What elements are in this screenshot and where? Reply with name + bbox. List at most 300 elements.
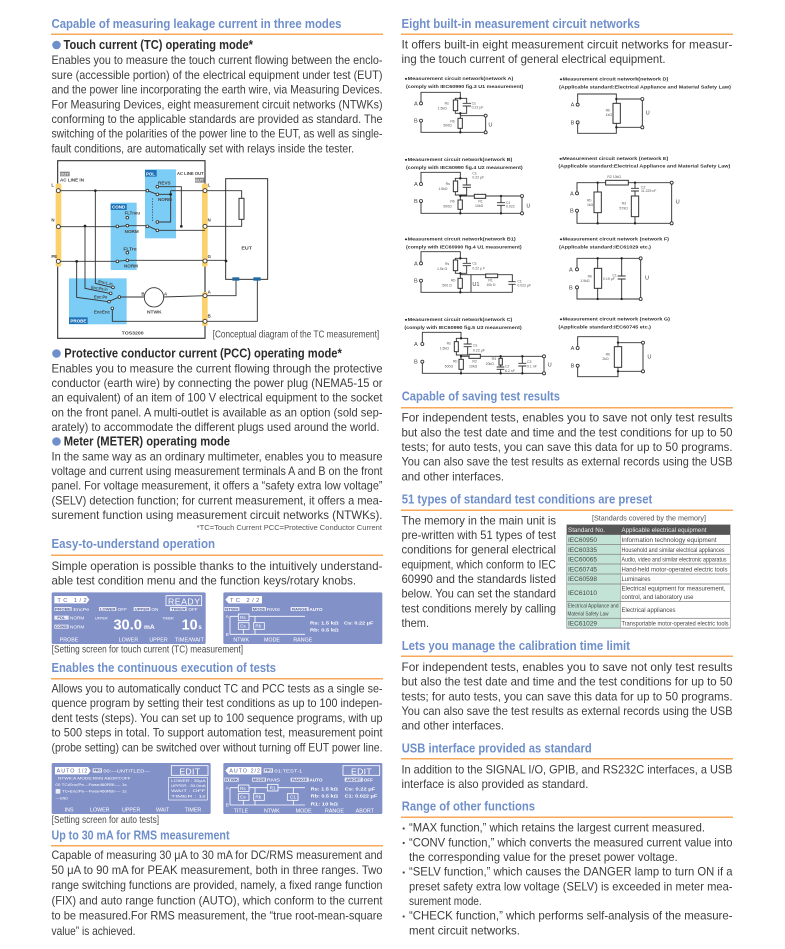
circuit: network C: 6.2 nF xyxy=(505,369,515,373)
LCD screen: auto test 2/2: ABORT xyxy=(356,808,375,814)
text block: saving test results: but also the test date and time and the test conditions for up to 50 xyxy=(402,425,733,439)
circuit: network B: Rb xyxy=(450,199,455,203)
LCD screen: auto test 1/2: EDIT xyxy=(179,766,201,776)
chart: conceptual diagram of the TC measurement: A xyxy=(208,289,212,294)
text block: meter mode: In the same way as an ordinary multimeter, enables you to measure xyxy=(52,449,383,463)
LCD screen: auto test 2/2: Rb: 0.5 kΩ xyxy=(311,794,338,799)
circuit: network C: R3 xyxy=(492,357,496,361)
LCD screen: TC setting 1/2: READY xyxy=(168,596,200,606)
LCD screen: auto test 1/2: 00:---UNTITLED--- xyxy=(103,769,150,775)
LCD screen: auto test 2/2: C1 xyxy=(290,795,296,800)
LCD screen: auto test 2/2: EDIT xyxy=(351,766,372,776)
LCD screen: TC setting 2/2: B xyxy=(226,632,229,637)
LCD screen: TC setting 1/2: mA xyxy=(144,624,155,631)
heading: USB: USB interface provided as standard xyxy=(402,740,592,755)
circuit: network B1: R1 xyxy=(488,279,493,283)
circuit: network D: 1kΩ xyxy=(606,113,612,117)
LCD screen: auto test 1/2: NTWK:A MODE:RMS ABORT:OFF xyxy=(58,777,132,781)
chart: conceptual diagram of the TC measurement: Enc:L.in xyxy=(98,279,113,287)
circuit: network C: Rb xyxy=(453,359,458,363)
chart: conceptual diagram of the TC measurement: PE xyxy=(51,254,57,259)
LCD screen: auto test 2/2: Rb xyxy=(255,795,262,800)
text block: RMS measurement: to be measured.For RMS measurement, the “true root-mean-square xyxy=(52,909,383,923)
text block: touch current mode: switching of the polarities of the power line to the EUT, as well as single- xyxy=(52,127,383,141)
table: standards covered by the memory: Household and similar electrical appliances xyxy=(622,547,725,554)
circuit: network D: ●Measurement circuit network(network D) xyxy=(559,77,669,82)
circuit: network C: R2 xyxy=(472,359,477,363)
chart: conceptual diagram of the TC measurement: PROBE xyxy=(70,318,86,323)
circuit: network B: Rs xyxy=(446,182,450,186)
chart: conceptual diagram of the TC measurement: AC LINE OUT xyxy=(177,171,204,176)
circuit: network E: Rb xyxy=(587,198,592,202)
text block: saving test results: and other interfaces. xyxy=(402,469,504,483)
circuit: network B1 xyxy=(404,237,531,293)
text block: touch current mode xyxy=(52,37,383,155)
circuit: network A: Cs xyxy=(472,101,476,105)
LCD screen: auto test 2/2: NTWK xyxy=(225,778,238,782)
LCD screen: TC setting 1/2 xyxy=(52,592,206,644)
chart: conceptual diagram of the TC measurement: FLTre xyxy=(123,246,137,251)
LCD screen: auto test 2/2: R1 xyxy=(270,785,276,790)
caption: TC setting screen: [Setting screen for touch current (TC) measurement] xyxy=(52,645,243,656)
circuit: network G: 2kΩ xyxy=(602,357,609,361)
heading: eight networks: Eight built-in measurement circuit networks xyxy=(402,16,640,31)
circuit: network D: A xyxy=(571,103,575,109)
circuit: network B: 1.5kΩ xyxy=(438,187,448,191)
circuit: network G: (Applicable standard:IEC60745 etc.) xyxy=(558,325,652,330)
chart: conceptual diagram of the TC measurement: L xyxy=(51,183,54,188)
LCD screen: TC setting 1/2: TC 1/2 xyxy=(57,598,87,604)
circuit: network B1: A xyxy=(414,261,418,267)
text block: easy operation xyxy=(52,559,382,588)
circuit: network C: U xyxy=(548,362,552,368)
LCD screen: auto test 2/2: MODE xyxy=(253,778,266,782)
circuit: network D: U xyxy=(646,110,650,116)
text block: continuous execution: quence program by setting their test conditions as up to 100 indepen- xyxy=(52,696,383,710)
text block: touch current mode: sure (accessible portion) of the electrical equipment under test (EUT) xyxy=(52,68,382,82)
circuit: network B: (comply with IEC60990 fig.4 U2 measurement) xyxy=(406,165,523,170)
circuit: network G xyxy=(558,317,671,377)
LCD screen: TC setting 1/2: NORM xyxy=(70,624,84,629)
LCD screen: TC setting 1/2: ON xyxy=(151,607,158,612)
caption: conceptual diagram: [Conceptual diagram of the TC measurement] xyxy=(213,330,379,341)
LCD screen: TC setting 2/2: AUTO xyxy=(309,607,323,612)
circuit: network C: 500Ω xyxy=(445,364,453,368)
LCD screen: TC setting 1/2: OFF xyxy=(188,607,198,612)
circuit: network B1: 10k Ω xyxy=(486,283,496,287)
LCD screen: auto test 1/2: LOWER : 30μA xyxy=(171,779,206,783)
circuit: network C: 9.1 nF xyxy=(527,364,537,368)
circuit: network A: 0.22 μF xyxy=(472,106,484,110)
LCD screen: auto test 2/2: AUTO xyxy=(309,778,323,783)
chart: conceptual diagram of the TC measurement: EUT xyxy=(195,178,204,183)
text block: preset conditions: 60990 and the standards listed xyxy=(402,572,556,586)
circuit: network A: (comply with IEC60990 fig.3 U1 measurement) xyxy=(406,84,524,89)
list: other functions: “CONV function,” which converts the measured current value into xyxy=(409,835,733,849)
list: other functions: surement mode. xyxy=(409,894,482,908)
circuit: network F: (Applicable standard:IEC61029 etc.) xyxy=(559,245,652,250)
table: standards covered by the memory: Electrical Appliance and xyxy=(568,604,618,610)
circuit: network F: Rb xyxy=(588,274,592,278)
circuit: network C: A xyxy=(414,342,418,348)
circuit: network B1: B xyxy=(414,279,418,285)
LCD screen: auto test 2/2: RANGE xyxy=(325,808,344,814)
circuit: network A: 1.5kΩ xyxy=(438,106,447,110)
list: other functions: “CHECK function,” which performs self-analysis of the measure- xyxy=(409,909,732,923)
LCD screen: auto test 1/2: 00 TC•Enc/Pe---Fwse460RBI---- 1s xyxy=(55,783,127,787)
LCD screen: TC setting 2/2: Rs xyxy=(240,615,246,620)
LCD screen: TC setting 1/2: UPPER xyxy=(135,607,150,611)
table: standards covered by the memory: IEC60598 xyxy=(568,576,597,583)
LCD screen: TC setting 1/2: TIME/WAIT xyxy=(175,638,205,644)
text block: RMS measurement: Capable of measuring 30 μA to 30 mA for DC/RMS measurement and xyxy=(52,848,382,862)
circuit: network B1: Cs xyxy=(472,262,477,266)
circuit: network F: U xyxy=(645,276,649,282)
text block: meter mode: voltage and current using measurement terminals A and B on the front xyxy=(52,464,383,478)
circuit: network A: 500Ω xyxy=(443,124,452,128)
list: other functions: the corresponding value for the preset power voltage. xyxy=(409,850,678,864)
LCD screen: TC setting 1/2: LOWER xyxy=(119,638,138,644)
LCD screen: TC setting 2/2: TC 2/2 xyxy=(230,598,259,604)
text block: continuous execution: Allows you to automatically conduct TC and PCC tests as a single se- xyxy=(52,681,382,695)
text block: calibration xyxy=(402,660,733,733)
circuit: network F: B xyxy=(569,285,573,291)
heading: saving test results: Capable of saving test results xyxy=(402,389,560,404)
circuit: network B1: C1 xyxy=(517,280,522,284)
text block: calibration: tests; for auto tests, you can save this data for up to 50 programs. xyxy=(402,689,732,703)
circuit: network F: 0.15 μF xyxy=(603,277,615,281)
text block: preset conditions: conditions for general electrical xyxy=(402,543,556,557)
LCD screen: auto test 1/2: WAIT : OFF xyxy=(171,789,207,793)
table: standards covered by the memory: Luminaires xyxy=(622,576,651,583)
LCD screen: TC setting 1/2: NORM xyxy=(70,615,84,620)
LCD screen: auto test 2/2: PRG xyxy=(265,769,272,773)
text block: continuous execution: to 500 steps in total. To support automation test, measurement point xyxy=(52,726,383,740)
LCD screen: auto test 2/2: A xyxy=(226,785,230,790)
text block: touch current mode: fault conditions, are automatically set with relays inside the tester. xyxy=(52,141,354,155)
chart: conceptual diagram of the TC measurement: NTWK xyxy=(147,310,163,315)
table: standards covered by the memory: Standard No. xyxy=(568,527,605,534)
LCD screen: auto test 1/2: UPPER : 30.0mA xyxy=(171,784,206,788)
table: standards covered by the memory: IEC60335 xyxy=(568,547,597,554)
LCD screen: auto test 2/2: MODE xyxy=(296,808,312,814)
text block: continuous execution: (probe setting) can be switched over without turning off EUT power line. xyxy=(52,740,382,754)
text block: RMS measurement: (FIX) and auto range function (AUTO), which conform to the current xyxy=(52,893,383,907)
LCD screen: auto test 2/2: AUTO 2/2 xyxy=(229,769,260,775)
circuit: network B: Cs xyxy=(472,171,477,175)
text block: touch current mode: For Measuring Devices, eight measurement circuit networks (NTWKs) xyxy=(52,97,383,111)
LCD screen: TC setting 2/2: RMS xyxy=(267,607,280,612)
table: standards covered by the memory: Applicable electrical equipment xyxy=(622,527,707,534)
LCD screen: TC setting 1/2: POL xyxy=(57,616,66,620)
table: standards covered by the memory: Transportable motor-operated electric tools xyxy=(622,620,729,628)
chart: conceptual diagram of the TC measurement: FLTneu xyxy=(125,211,140,216)
LCD screen: TC setting 2/2: Rs: 1.5 kΩ xyxy=(310,621,339,626)
table: standards covered by the memory: Information technology equipment xyxy=(622,537,717,544)
chart: conceptual diagram of the TC measurement: N xyxy=(51,218,54,223)
text block: RMS measurement: value” is achieved. xyxy=(52,924,136,938)
text block: preset conditions: below. You can set the standard xyxy=(402,587,556,601)
text block: meter mode: panel. For voltage measurement, it offers a “safety extra low voltage” xyxy=(52,479,382,493)
circuit: network B: R1 xyxy=(478,199,483,203)
LCD screen: TC setting 1/2: 30.0 xyxy=(113,617,142,633)
LCD screen: auto test 2/2: Cs: 0.22 μF xyxy=(345,787,376,792)
circuit: network A: ●Measurement circuit network(network A) xyxy=(404,76,514,81)
chart: conceptual diagram of the TC measurement: POL xyxy=(146,171,155,176)
LCD screen: TC setting 2/2: MODE xyxy=(264,638,280,644)
text block: preset conditions: pre-written with 51 types of test xyxy=(402,528,557,542)
text block: meter mode: Meter (METER) operating mode xyxy=(64,434,230,449)
circuit: network E: R2 10kΩ xyxy=(607,175,621,179)
text block: protective conductor current mode: Protective conductor current (PCC) operating mode* xyxy=(64,346,343,361)
circuit: network C: 0.22 μF xyxy=(473,348,485,352)
circuit: network D: (Applicable standard:Electrical Appliance and Material Safety Law) xyxy=(559,85,732,90)
circuit: network B1: (comply with IEC60990 fig.4 U1 measurement) xyxy=(406,245,522,250)
text block: calibration: You can also save the test results as external records using the USB xyxy=(402,704,732,718)
LCD screen: auto test 2/2: R1: 10 kΩ xyxy=(311,801,338,806)
text block: protective conductor current mode: arately) to accommodate the different plugs used around the world. xyxy=(52,420,380,434)
circuit: network B1: 500 Ω xyxy=(442,284,452,288)
LCD screen: TC setting 1/2: TIMER xyxy=(162,616,174,620)
LCD screen: auto test 1/2: LOWER xyxy=(90,808,110,814)
circuit: network D xyxy=(559,77,732,133)
circuit: network E: B xyxy=(570,209,574,215)
list: other functions: preset safety extra low voltage (SELV) is exceeded in meter mea- xyxy=(409,879,733,893)
circuit: network D: B xyxy=(571,120,575,126)
chart: conceptual diagram of the TC measurement: NORM xyxy=(125,229,139,234)
circuit: network E: U xyxy=(676,199,680,205)
list: other functions: “MAX function,” which retains the largest current measured. xyxy=(409,821,705,835)
LCD screen: TC setting 1/2: OFF xyxy=(118,607,127,612)
text block: RMS measurement xyxy=(52,848,383,938)
text block: continuous execution: dent tests (steps). You can set up to 100 sequence programs, with up xyxy=(52,711,383,725)
LCD screen: TC setting 2/2: Rb: 0.5 kΩ xyxy=(310,627,339,632)
circuit: network F: C1 xyxy=(612,274,617,278)
LCD screen: TC setting 2/2: RANGE xyxy=(293,638,313,644)
LCD screen: auto test 1/2: TC•Enc/Pe---Fwse460RBI---- 1s xyxy=(62,790,127,794)
text block: USB: interface is also provided as standard. xyxy=(402,777,588,791)
text block: protective conductor current mode: Enables you to measure the current flowing through the protective xyxy=(52,361,383,375)
circuit: network C: Cs xyxy=(473,344,478,348)
circuit: network C: C2 xyxy=(505,365,510,369)
LCD screen: auto test 1/2: UPPER xyxy=(122,808,141,814)
list: other functions: “SELV function,” which causes the DANGER lamp to turn ON if a xyxy=(409,865,733,879)
LCD screen: auto test 2/2: TITLE xyxy=(234,808,249,814)
circuit: network B1: Rb xyxy=(451,279,456,283)
LCD screen: TC setting 2/2: RANGE xyxy=(292,607,308,611)
text block: protective conductor current mode: on the front panel. A multi-outlet is available as an option (sold sep- xyxy=(52,405,382,419)
LCD screen: TC setting 1/2: UPPER xyxy=(95,616,108,620)
circuit: network B1: U1 xyxy=(472,282,480,288)
text block: preset conditions: The memory in the main unit is xyxy=(402,513,556,527)
table: standards covered by the memory: Electrical appliances xyxy=(622,607,676,614)
table: standards covered by the memory: IEC60950 xyxy=(568,537,597,544)
circuit: network B: 10kΩ xyxy=(475,204,484,208)
LCD screen: auto test 2/2: RANGE xyxy=(292,778,308,782)
list: other functions xyxy=(403,821,733,937)
circuit: network E: 11.225 nF xyxy=(641,189,656,193)
circuit: network F: 1.5kΩ xyxy=(580,279,590,283)
circuit: network A xyxy=(404,76,524,134)
circuit: network E: ●Measurement circuit network (network E) xyxy=(559,156,669,161)
LCD screen: auto test 1/2: AUTO 1/2 xyxy=(57,769,87,775)
LCD screen: TC setting 2/2: Cs xyxy=(240,624,246,629)
text block: continuous execution xyxy=(52,681,383,754)
chart: conceptual diagram of the TC measurement: G xyxy=(208,254,212,259)
LCD screen: auto test 2/2: 01:TEST-1 xyxy=(274,768,303,773)
circuit: network F xyxy=(559,237,670,300)
text block: touch current mode: conforming to the applicable standards are provided as standard. The xyxy=(52,112,383,126)
table: standards covered by the memory: IEC61010 xyxy=(568,590,597,597)
table: standards covered by the memory: IEC60745 xyxy=(568,566,597,574)
circuit: network G: A xyxy=(571,346,575,352)
LCD screen: auto test 2/2: C1: 0.022 μF xyxy=(345,794,378,799)
circuit: network B1: 0.22 μ F xyxy=(472,266,485,270)
LCD screen: TC setting 1/2: PROBE xyxy=(55,607,72,611)
circuit: network B: C1 xyxy=(506,201,511,205)
circuit: network C: ●Measurement circuit network(network C) xyxy=(404,317,513,322)
chart: conceptual diagram of the TC measurement: A xyxy=(164,291,168,296)
heading: easy operation: Easy-to-understand operation xyxy=(52,536,215,551)
text block: touch current mode: Touch current (TC) operating mode* xyxy=(64,37,254,52)
text block: meter mode: surement function using measurement circuit networks (NTWKs). xyxy=(52,508,382,522)
table: standards covered by the memory: Material Safety Law xyxy=(568,612,609,618)
circuit: network A: Rs xyxy=(445,102,449,106)
text block: calibration: and other interfaces. xyxy=(402,719,504,733)
heading: other functions: Range of other functions xyxy=(402,799,535,814)
circuit: network D: Rb xyxy=(606,109,610,113)
text block: protective conductor current mode: an equivalent) of an item of 100 V electrical equipment to the socket xyxy=(52,391,383,405)
circuit: network A: Rb xyxy=(450,119,455,123)
LCD screen: auto test 1/2 xyxy=(52,763,211,814)
chart: conceptual diagram of the TC measurement: COND xyxy=(112,205,125,210)
text block: meter mode: (SELV) detection function; for current measurement, it offers a mea- xyxy=(52,493,383,507)
LCD screen: auto test 2/2: NTWK xyxy=(264,808,280,814)
circuit: network B: 500Ω xyxy=(443,204,452,208)
table: standards covered by the memory: Electrical equipment for measurement, xyxy=(622,586,726,592)
LCD screen: TC setting 2/2: Cs: 0.22 μF xyxy=(344,621,373,626)
circuit: network B: 0.22 μF xyxy=(472,176,484,180)
circuit: network C: 10kΩ xyxy=(469,364,478,368)
LCD screen: auto test 2/2: Rs: 1.5 kΩ xyxy=(311,787,338,792)
text block: saving test results: For independent tests, enables you to save not only test results xyxy=(402,411,732,425)
circuit: network F: A xyxy=(569,268,573,274)
text block: touch current mode: Enables you to measure the touch current flowing between the enclo- xyxy=(52,53,382,67)
circuit: network B xyxy=(404,157,530,215)
circuit: network E xyxy=(558,156,731,225)
LCD screen: auto test 2/2: Rs xyxy=(240,786,246,791)
chart: conceptual diagram of the TC measurement: OUT xyxy=(60,172,69,177)
circuit: network E: A xyxy=(570,191,574,197)
chart: conceptual diagram of the TC measurement: EncEnc xyxy=(94,309,111,314)
LCD screen: TC setting 2/2: Rb xyxy=(255,624,262,629)
circuit: network G: Rb xyxy=(606,352,610,356)
circuit: network B: U xyxy=(526,203,530,209)
chart: conceptual diagram of the TC measurement: REVS xyxy=(158,180,171,185)
circuit: network B: 0.022 xyxy=(506,205,515,209)
chart: conceptual diagram of the TC measurement: NORM xyxy=(158,197,172,202)
table: standards covered by the memory: IEC60065 xyxy=(568,556,597,564)
LCD screen: auto test 1/2: ----END xyxy=(55,796,68,800)
circuit: network A: A xyxy=(414,101,418,107)
circuit: network C: B xyxy=(414,360,418,366)
circuit: network G: B xyxy=(571,364,575,370)
circuit: network F: ●Measurement circuit network (network F) xyxy=(559,237,670,242)
LCD screen: TC setting 1/2: UPPER xyxy=(149,638,168,644)
LCD screen: auto test 1/2: TIMER xyxy=(185,808,201,814)
circuit: network B: B xyxy=(414,199,418,205)
text block: preset conditions: them. xyxy=(402,616,429,630)
circuit: network B1: Rs xyxy=(445,262,450,266)
LCD screen: auto test 2/2: Cs xyxy=(240,795,246,800)
caption: standards table: [Standards covered by the memory] xyxy=(592,514,706,522)
chart: conceptual diagram of the TC measurement: Enc:Pe xyxy=(94,295,108,300)
LCD screen: auto test 2/2: B xyxy=(226,803,229,808)
chart: conceptual diagram of the TC measurement: B xyxy=(141,291,144,296)
text block: calibration: but also the test date and time and the test conditions for up to 50 xyxy=(402,675,733,689)
LCD screen: TC setting 1/2: 10 xyxy=(182,617,198,633)
LCD screen: TC setting 1/2: EncPe xyxy=(73,607,90,612)
heading: preset conditions: 51 types of standard test conditions are preset xyxy=(402,491,653,506)
text block: meter mode xyxy=(52,434,383,522)
text block: easy operation: able test condition menu and the function keys/rotary knobs. xyxy=(52,574,356,588)
table: standards covered by the memory: control, and laboratory use xyxy=(622,594,694,601)
LCD screen: TC setting 2/2: MODE xyxy=(253,607,266,611)
LCD screen: TC setting 1/2: LOWER xyxy=(100,607,116,611)
text block: saving test results: You can also save the test results as external records using the USB xyxy=(402,455,732,469)
list: other functions: ment circuit networks. xyxy=(409,923,520,937)
text block: easy operation: Simple operation is possible thanks to the intuitively understand- xyxy=(52,559,382,573)
circuit: network A: B xyxy=(414,119,418,125)
heading: continuous execution: Enables the continuous execution of tests xyxy=(52,660,276,675)
circuit: network C: 20kΩ xyxy=(486,362,494,366)
circuit: network C: 1.5kΩ xyxy=(440,346,449,350)
chart: conceptual diagram of the TC measurement: L xyxy=(208,183,211,188)
circuit: network B: ●Measurement circuit network(network B) xyxy=(404,157,513,162)
text block: USB xyxy=(402,762,732,791)
circuit: network C: C3 xyxy=(527,360,532,364)
LCD screen: TC setting 2/2: NTWK xyxy=(233,638,249,644)
text block: saving test results: tests; for auto tests, you can save this data for up to 50 programs. xyxy=(402,440,732,454)
chart: conceptual diagram of the TC measurement: AC LINE IN xyxy=(60,177,84,182)
circuit: network B: A xyxy=(414,182,418,188)
LCD screen: TC setting 1/2: s xyxy=(198,625,202,631)
text block: preset conditions: test conditions merely by calling xyxy=(402,601,556,615)
text block: touch current mode: and the power line incorporating the earth wire, via Measuring Devices. xyxy=(52,83,382,97)
text block: eight networks xyxy=(402,38,732,66)
circuit: network B1: 1.5k Ω xyxy=(437,267,448,271)
table: standards covered by the memory: Audio, video and similar electronic apparatus xyxy=(622,556,727,564)
text block: saving test results xyxy=(402,411,733,483)
LCD screen: auto test 1/2: WAIT xyxy=(156,808,170,814)
LCD screen: TC setting 1/2: PROBE xyxy=(60,638,79,644)
LCD screen: TC setting 2/2 xyxy=(223,592,382,644)
text block: USB: In addition to the SIGNAL I/O, GPIB, and RS232C interfaces, a USB xyxy=(402,762,732,776)
LCD screen: auto test 2/2: RMS xyxy=(267,778,280,783)
LCD screen: auto test 2/2: OFF xyxy=(364,778,373,783)
text block: preset conditions: equipment, which conform to IEC xyxy=(402,557,556,571)
chart: conceptual diagram of the TC measurement: TOS3200 xyxy=(122,331,144,336)
text block: RMS measurement: range switching functions are provided, namely, a fixed range function xyxy=(52,878,382,892)
heading: three modes: Capable of measuring leakage current in three modes xyxy=(52,16,342,31)
circuit: network G: ●Measurement circuit network (network G) xyxy=(559,317,671,322)
text block: protective conductor current mode xyxy=(52,346,383,434)
caption: auto test setting screen: [Setting screen for auto tests] xyxy=(52,815,159,826)
chart: conceptual diagram of the TC measurement: EUT xyxy=(241,246,252,252)
circuit: network E: (Applicable standard:Electrical Appliance and Material Safety Law) xyxy=(558,164,731,169)
circuit: network E: C2 xyxy=(641,186,646,190)
text block: calibration: For independent tests, enables you to save not only test results xyxy=(402,660,732,674)
